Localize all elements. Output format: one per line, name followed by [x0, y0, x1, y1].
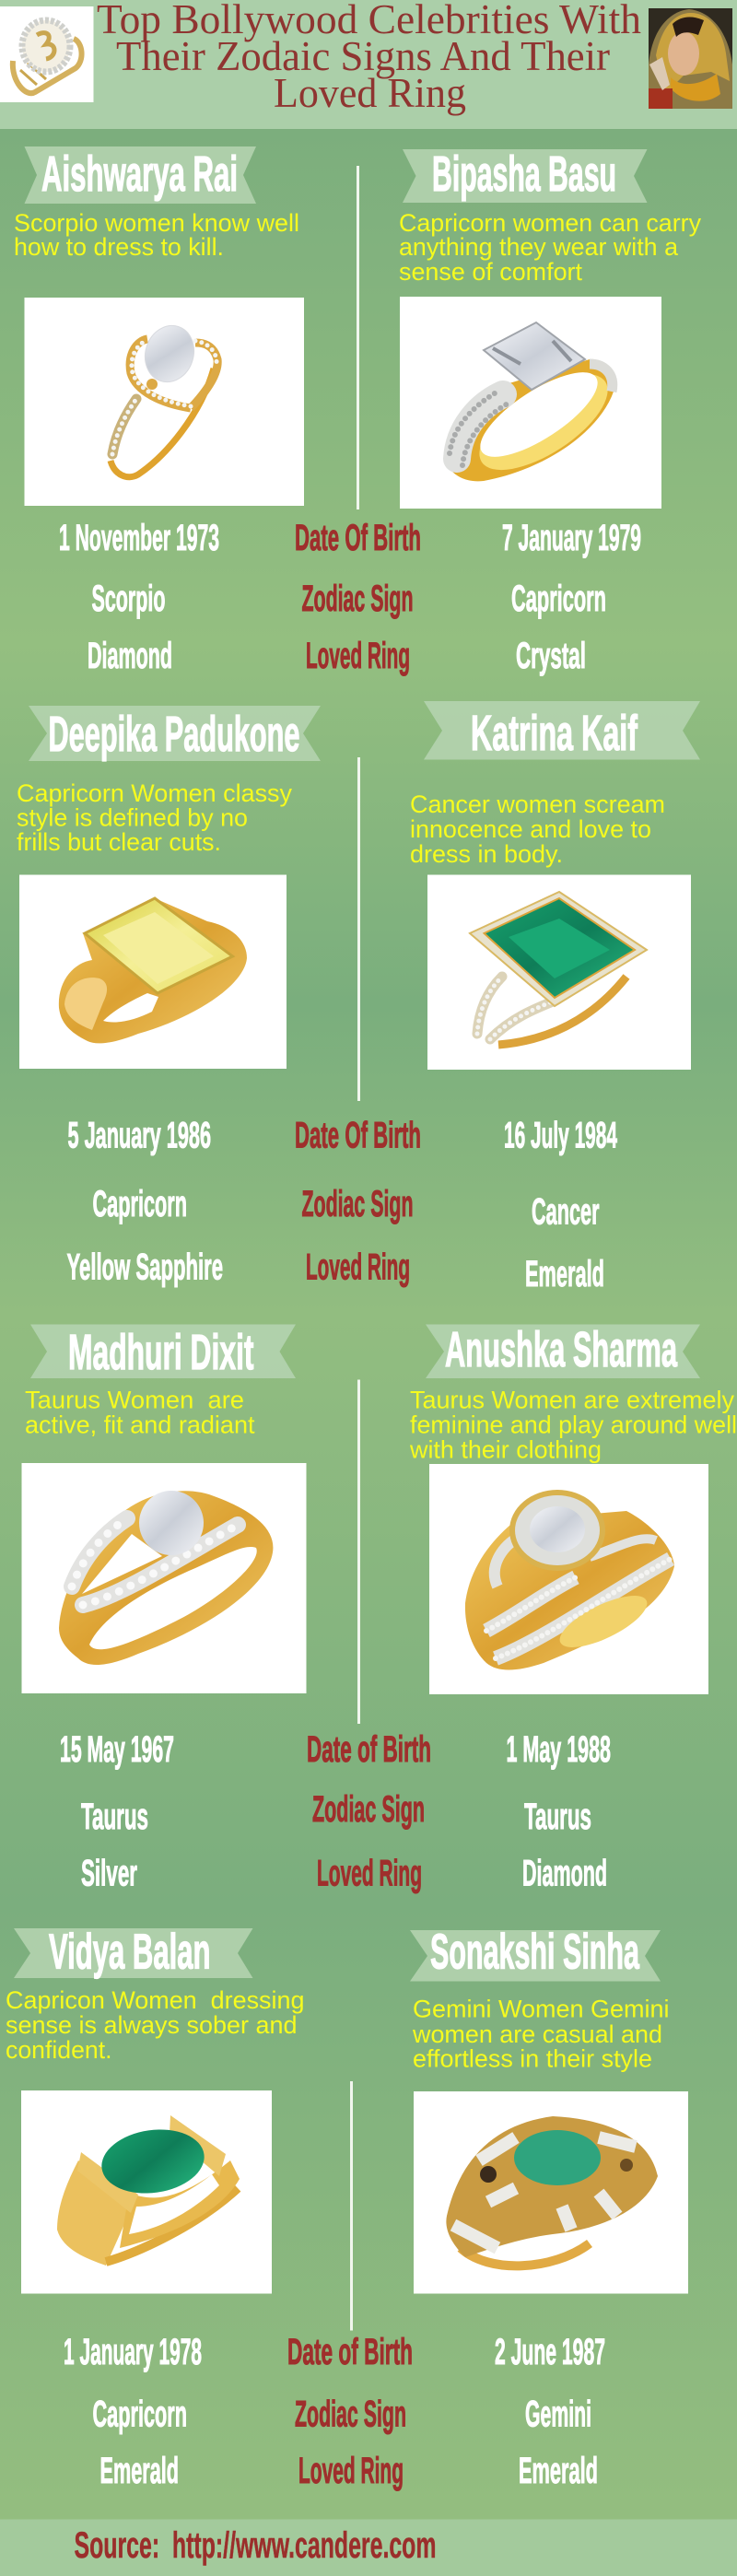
row: zodiac sign: Capricorn: [511, 579, 606, 619]
row: loved ring: [99, 2451, 598, 2491]
row: loved ring: [66, 1247, 604, 1294]
row: date of birth: [68, 1115, 617, 1155]
title: Their Zodaic Signs And Their: [116, 33, 610, 79]
text: Vidya description: confident.: [6, 2036, 112, 2064]
row: loved ring: Silver: [81, 1854, 137, 1894]
text: Aishwarya description: [14, 209, 299, 261]
row: zodiac sign: Taurus: [524, 1797, 591, 1837]
row: date of birth: Date of Birth: [287, 2332, 413, 2372]
title: [97, 0, 641, 116]
image: diamond heart ring: [24, 298, 304, 506]
text: Madhuri description: active, fit and radiant: [25, 1411, 255, 1439]
row: zodiac sign: Gemini: [525, 2394, 591, 2434]
image: silver solitaire ring: [22, 1463, 306, 1693]
ribbon: Deepika Padukone: Deepika Padukone: [48, 707, 300, 762]
ribbon: Bipasha Basu: [403, 146, 647, 203]
row: zodiac sign: Zodiac Sign: [312, 1789, 425, 1830]
row: date of birth: 1 January 1978: [64, 2332, 202, 2372]
header band: [0, 0, 737, 129]
text: Deepika description: frills but clear cuts.: [17, 828, 221, 856]
image: yellow sapphire ring: [19, 875, 287, 1069]
ribbon: Deepika Padukone: [29, 706, 321, 762]
row: zodiac sign: Zodiac Sign: [302, 579, 413, 619]
row: loved ring: Loved Ring: [306, 636, 410, 676]
text: Katrina description: Cancer women scream: [410, 790, 665, 818]
row: zodiac sign: [92, 1184, 599, 1233]
text: Anushka description: Taurus Women are extremely: [410, 1386, 735, 1413]
row: date of birth: Date Of Birth: [295, 1115, 421, 1155]
text: Bipasha description: Capricorn women can carry: [399, 209, 702, 237]
panel: Aishwarya Rai and Bipasha Basu: [14, 146, 702, 676]
text: Aishwarya description: Scorpio women know well: [14, 209, 299, 237]
row: date of birth: 1 May 1988: [507, 1729, 611, 1770]
row: loved ring: Loved Ring: [306, 1247, 410, 1288]
row: zodiac sign: Capricorn: [92, 2394, 187, 2434]
text: Anushka description: [409, 1386, 737, 1463]
source footer: [0, 2519, 737, 2576]
text: Madhuri description: [25, 1386, 255, 1439]
row: zodiac sign: Scorpio: [92, 579, 166, 619]
row: date of birth: 2 June 1987: [495, 2332, 605, 2372]
row: loved ring: Crystal: [516, 636, 586, 676]
text: Sonakshi description: [412, 1996, 669, 2073]
text: Sonakshi description: effortless in their style: [413, 2045, 652, 2073]
row: date of birth: [59, 518, 641, 558]
image: emerald halo ring: [427, 875, 691, 1070]
ribbon: Katrina Kaif: [424, 701, 700, 761]
row: zodiac sign: Capricorn: [92, 1184, 187, 1224]
row: zodiac sign: [92, 2394, 591, 2434]
row: zodiac sign: Zodiac Sign: [295, 2394, 406, 2434]
icon: header portrait: [649, 8, 732, 109]
panel: Vidya Balan and Sonakshi Sinha: [6, 1924, 688, 2491]
row: date of birth: 16 July 1984: [504, 1115, 617, 1155]
text: Madhuri description: Taurus Women are: [25, 1386, 244, 1413]
ribbon: Sonakshi Sinha: [410, 1924, 661, 1981]
row: loved ring: Emerald: [99, 2451, 179, 2491]
title: Loved Ring: [274, 70, 466, 116]
ribbon: Madhuri Dixit: Madhuri Dixit: [68, 1325, 254, 1380]
text: Bipasha description: anything they wear with a: [399, 233, 678, 261]
text: Deepika description: [17, 779, 293, 856]
text: Katrina description: [410, 790, 665, 868]
row: loved ring: Loved Ring: [317, 1854, 422, 1894]
row: date of birth: Date of Birth: [307, 1729, 431, 1770]
ribbon: Aishwarya Rai: [24, 146, 256, 204]
row: loved ring: [88, 636, 586, 676]
text: Vidya description: [6, 1986, 304, 2064]
row: loved ring: Emerald: [519, 2451, 598, 2491]
row: loved ring: Loved Ring: [298, 2451, 404, 2491]
ribbon: Vidya Balan: [14, 1924, 252, 1979]
row: date of birth: 1 November 1973: [59, 518, 219, 558]
row: loved ring: Diamond: [88, 636, 172, 676]
source footer: Source: http://www.candere.com: [74, 2525, 437, 2566]
panel: Deepika Padukone and Katrina Kaif: [17, 701, 700, 1294]
text: Aishwarya description: how to dress to kill.: [14, 233, 224, 261]
row: loved ring: [81, 1854, 607, 1894]
row: date of birth: [64, 2332, 605, 2372]
text: Sonakshi description: women are casual and: [412, 2020, 662, 2048]
image: diamond filigree ring: [429, 1464, 708, 1694]
row: loved ring: Yellow Sapphire: [66, 1247, 223, 1288]
text: Anushka description: with their clothing: [409, 1435, 602, 1463]
text: Anushka description: feminine and play around well: [410, 1411, 737, 1439]
row: loved ring: Emerald: [525, 1254, 604, 1294]
image: emerald ornate ring: [414, 2091, 688, 2294]
row: date of birth: 5 January 1986: [68, 1115, 211, 1155]
text: Katrina description: innocence and love to: [410, 815, 651, 843]
row: zodiac sign: Taurus: [81, 1797, 148, 1837]
text: Vidya description: Capricon Women dressing: [6, 1986, 304, 2014]
row: zodiac sign: Cancer: [532, 1192, 599, 1233]
row: zodiac sign: [92, 579, 606, 619]
text: Katrina description: dress in body.: [410, 840, 563, 868]
text: Deepika description: Capricorn Women classy: [17, 779, 293, 807]
text: Deepika description: style is defined by no: [17, 803, 248, 831]
row: date of birth: [60, 1729, 611, 1770]
row: zodiac sign: [81, 1789, 591, 1837]
ribbon: Vidya Balan: Vidya Balan: [49, 1924, 210, 1979]
text: Vidya description: sense is always sober and: [6, 2011, 298, 2039]
ribbon: Madhuri Dixit: [30, 1325, 296, 1380]
row: zodiac sign: Zodiac Sign: [302, 1184, 413, 1224]
row: date of birth: Date Of Birth: [295, 518, 421, 558]
text: Bipasha description: sense of comfort: [399, 258, 583, 286]
ribbon: Aishwarya Rai: Aishwarya Rai: [41, 146, 238, 202]
panel: Madhuri Dixit and Anushka Sharma: [22, 1322, 737, 1894]
image: crystal princess ring: [400, 297, 661, 509]
text: Bipasha description: [399, 209, 702, 286]
icon: header om ring: [0, 6, 94, 102]
row: date of birth: 15 May 1967: [60, 1729, 174, 1770]
text: Sonakshi description: Gemini Women Gemini: [413, 1996, 669, 2023]
image: emerald bar ring: [21, 2090, 272, 2294]
row: loved ring: Diamond: [522, 1854, 607, 1894]
